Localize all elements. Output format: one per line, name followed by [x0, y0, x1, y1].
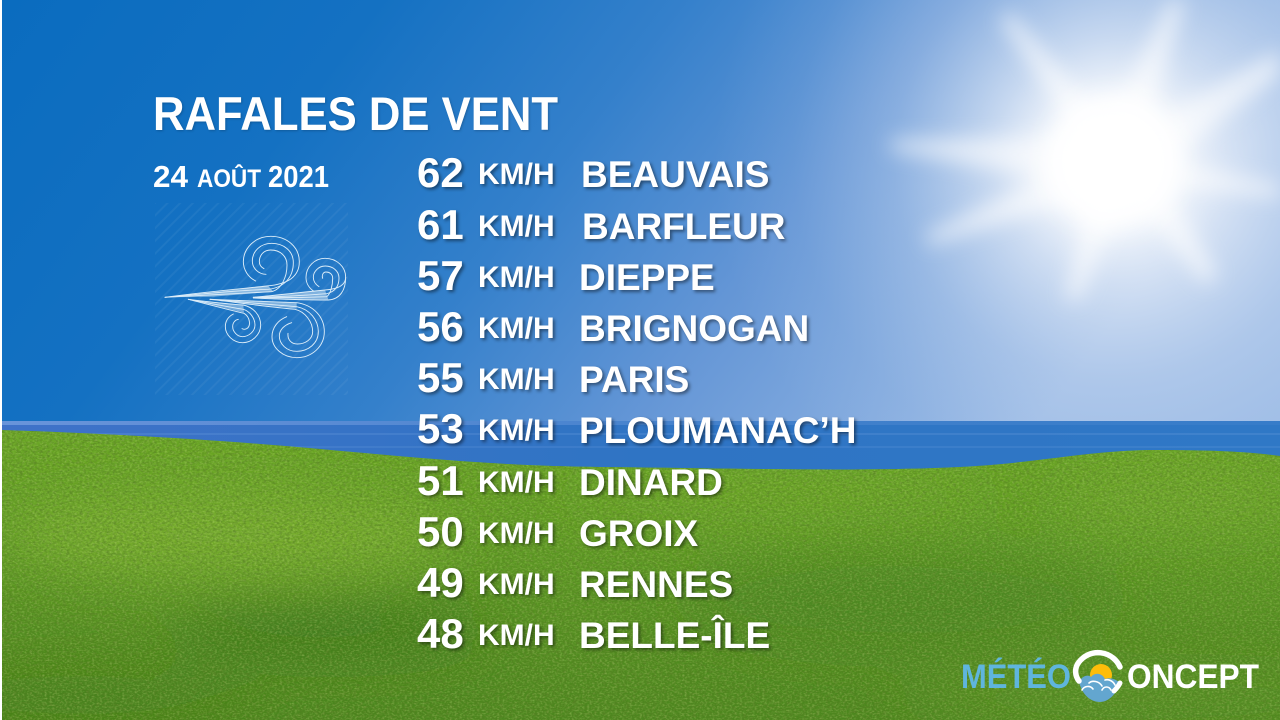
row: Belle-Île: BELLE-ÎLE	[579, 615, 770, 656]
row: Barfleur	[417, 201, 788, 248]
row: Barfleur: 61	[417, 201, 464, 248]
date	[153, 159, 329, 194]
row: Dieppe: KM/H	[478, 261, 555, 294]
row: Groix: GROIX	[579, 513, 698, 554]
row: Groix: 50	[417, 508, 464, 555]
row: Rennes: 49	[417, 559, 464, 606]
row: Belle-Île: KM/H	[478, 619, 555, 652]
wind gust list	[417, 149, 858, 657]
title: RAFALES DE VENT	[153, 87, 558, 140]
date: 24	[153, 159, 189, 194]
date: 2021	[268, 159, 329, 194]
row: Dieppe	[417, 252, 718, 299]
row: Dinard: 51	[417, 457, 464, 504]
row: Paris: KM/H	[478, 363, 555, 396]
row: Brignogan	[417, 303, 811, 350]
row: Ploumanac'h	[417, 405, 858, 452]
row: Beauvais	[417, 149, 772, 196]
row: Paris	[417, 354, 692, 401]
row: Belle-Île: 48	[417, 610, 464, 657]
row: Dinard: DINARD	[579, 462, 723, 503]
row: Brignogan: BRIGNOGAN	[579, 308, 809, 349]
row: Dieppe: 57	[417, 252, 464, 299]
row: Paris: 55	[417, 354, 464, 401]
logo: Météo Concept: ONCEPT	[1127, 658, 1259, 696]
row: Barfleur: BARFLEUR	[582, 206, 785, 247]
row: Rennes	[417, 559, 736, 606]
row: Beauvais: KM/H	[478, 158, 555, 191]
row: Beauvais: 62	[417, 149, 464, 196]
row: Barfleur: KM/H	[478, 210, 555, 243]
row: Dinard: KM/H	[478, 466, 555, 499]
row: Paris: PARIS	[579, 359, 689, 400]
row: Brignogan: KM/H	[478, 312, 555, 345]
logo: Météo Concept: MÉTÉO	[961, 658, 1071, 696]
row: Rennes: RENNES	[579, 564, 733, 605]
sun rays	[890, 0, 1280, 300]
row: Belle-Île	[417, 610, 772, 657]
row: Rennes: KM/H	[478, 568, 555, 601]
row: Ploumanac'h: KM/H	[478, 414, 555, 447]
row: Dinard	[417, 457, 726, 504]
date: AOÛT	[197, 163, 261, 193]
row: Ploumanac'h: 53	[417, 405, 464, 452]
row: Groix: KM/H	[478, 517, 555, 550]
row: Ploumanac'h: PLOUMANAC’H	[579, 410, 856, 451]
row: Brignogan: 56	[417, 303, 464, 350]
row: Dieppe: DIEPPE	[579, 257, 715, 298]
row: Groix	[417, 508, 700, 555]
row: Beauvais: BEAUVAIS	[581, 154, 769, 195]
